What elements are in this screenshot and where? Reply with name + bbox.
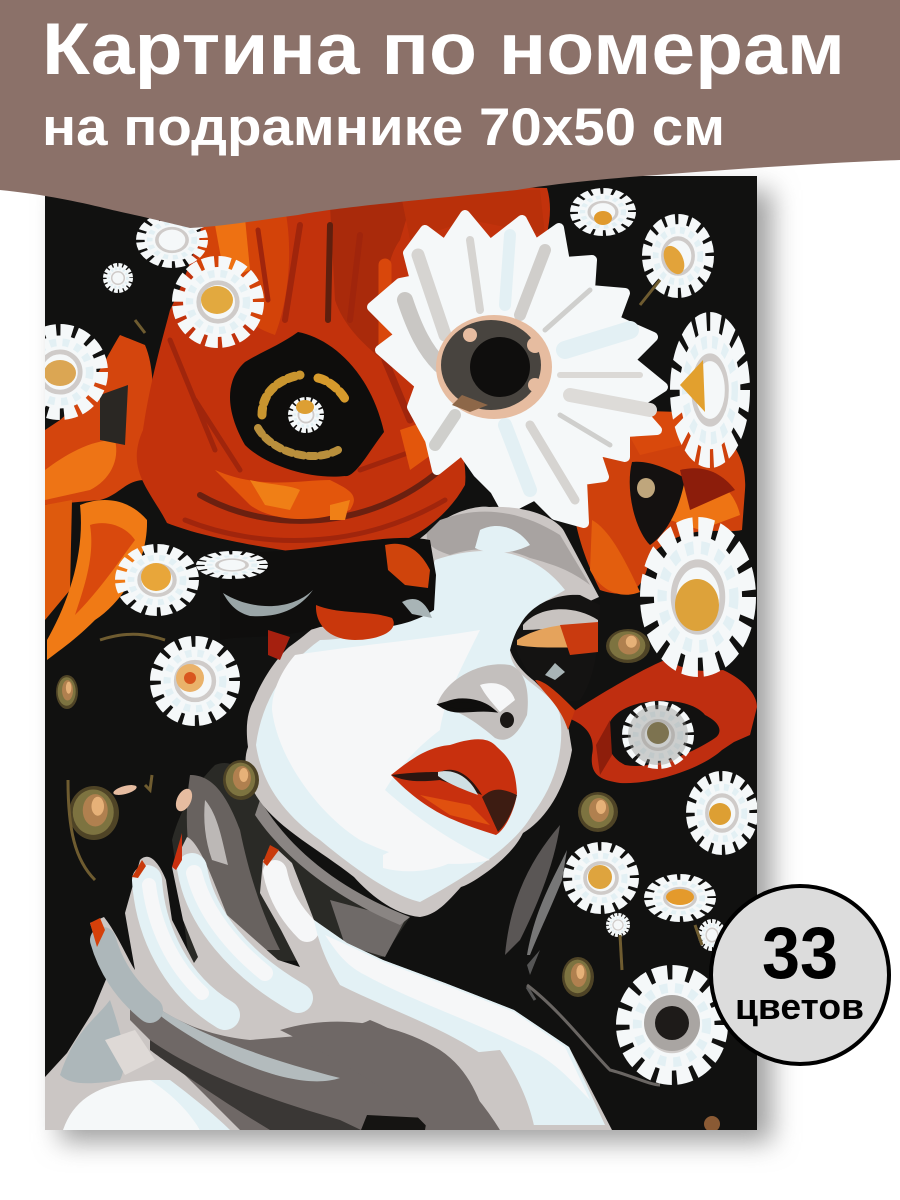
flower centre xyxy=(436,315,552,419)
dark hair strands xyxy=(505,825,660,1085)
large red poppy xyxy=(137,185,550,557)
poppy dark centre xyxy=(230,332,384,477)
painting background xyxy=(45,176,757,1130)
white gerbera flower xyxy=(372,215,663,523)
badge: 33 colours xyxy=(711,886,889,1064)
nose xyxy=(437,664,528,740)
canvas shadow xyxy=(60,190,772,1142)
daisies xyxy=(19,191,753,1077)
lips xyxy=(391,739,517,835)
subtitle: на подрамнике 70х50 см xyxy=(42,98,725,157)
badge: 33 colours: цветов xyxy=(735,986,864,1027)
title: Картина по номерам xyxy=(42,9,845,90)
face xyxy=(220,507,600,917)
thin stems xyxy=(68,280,702,970)
badge: 33 colours: 33 xyxy=(762,913,838,994)
red nails xyxy=(90,833,279,947)
feathered dark band over left eye xyxy=(220,538,436,660)
left orange poppy petals xyxy=(45,335,153,660)
lower right red poppy ring xyxy=(565,660,757,783)
poppy seed buds xyxy=(56,629,720,1132)
right eye xyxy=(515,595,600,730)
hand and shoulder xyxy=(45,833,612,1130)
right red poppy xyxy=(572,410,745,595)
painting xyxy=(19,176,757,1132)
neck and shadowed skin xyxy=(172,763,410,965)
fingers xyxy=(103,868,307,1015)
back of hand highlight xyxy=(280,920,605,1130)
banner: brown wavy header xyxy=(0,0,900,228)
